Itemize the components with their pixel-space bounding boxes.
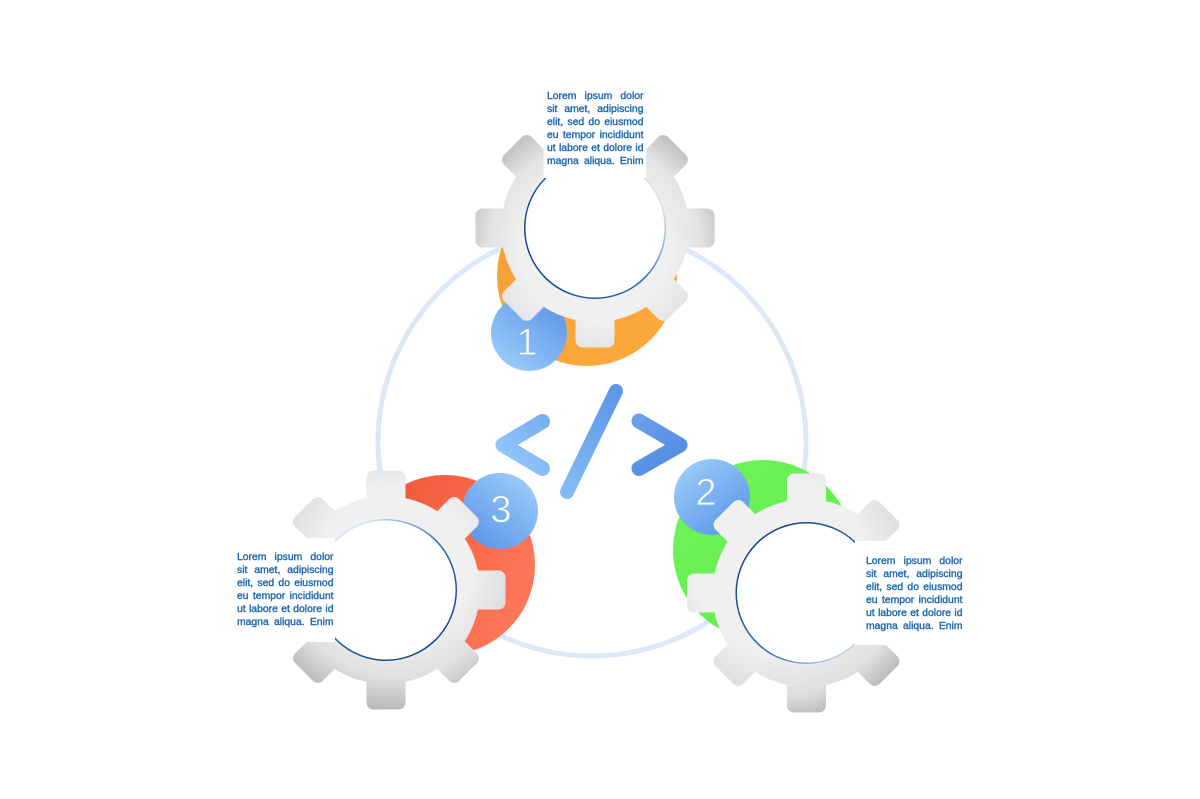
text block: gear 2: eu tempor incididunt [866,595,962,606]
gear 1 (top) [482,85,708,340]
number badge 2 [674,459,750,535]
text block: gear 3 [237,552,334,628]
icon: code brackets [503,391,680,492]
text block: gear 2: ut labore et dolore id [866,608,962,619]
text block: gear 1: elit, sed do eiusmod [547,117,644,128]
number badge 1: 1 [516,322,538,364]
text block: gear 3: magna aliqua. Enim [237,617,334,628]
text block: gear 3: elit, sed do eiusmod [237,578,334,589]
text block: gear 2: magna aliqua. Enim [866,621,962,632]
text block: gear 2: elit, sed do eiusmod [866,582,962,593]
text block: gear 1: eu tempor incididunt [547,130,644,141]
number badge 3 [462,473,538,549]
left angle bracket [503,422,542,468]
text block: gear 3: sit amet, adipiscing [237,565,334,576]
text block: gear 2: sit amet, adipiscing [866,569,962,580]
gear 3 (left) [226,478,498,702]
text block: gear 1 [547,91,644,167]
green disc [673,460,853,640]
text block: gear 3: ut labore et dolore id [237,604,334,615]
text block: gear 1: ut labore et dolore id [547,143,644,154]
number badge 2: 2 [695,472,717,514]
number badge 1 [491,295,567,371]
text block: gear 1: magna aliqua. Enim [547,156,644,167]
number badge 3: 3 [490,489,512,531]
connecting ring [378,228,806,656]
orange disc [497,186,677,366]
red disc [355,475,535,655]
gear 2 (right) [694,480,973,706]
text block: gear 2 [866,556,963,632]
text block: gear 2: Lorem ipsum dolor [866,556,962,567]
text block: gear 1: sit amet, adipiscing [547,104,644,115]
text block: gear 1: Lorem ipsum dolor [547,91,644,102]
text block: gear 3: Lorem ipsum dolor [237,552,334,563]
slash [567,391,616,492]
text block: gear 3: eu tempor incididunt [237,591,334,602]
right angle bracket [639,421,680,468]
